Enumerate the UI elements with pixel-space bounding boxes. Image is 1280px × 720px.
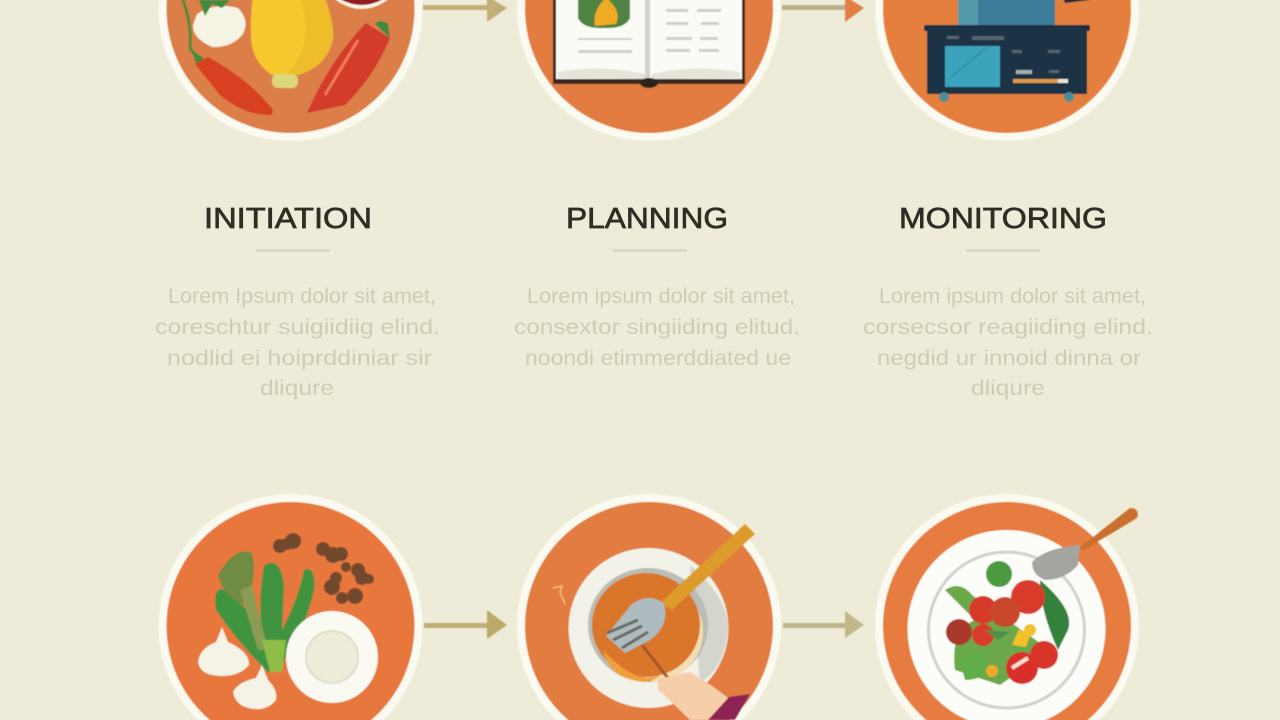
icon: dark handle — [1063, 0, 1092, 3]
heading: initiation: INITIATION — [204, 203, 372, 235]
gauge bar — [1013, 79, 1068, 83]
panel: planning recipe book circle — [517, 0, 781, 141]
icon: knife blade — [642, 645, 668, 678]
arrow: cooking to serving — [783, 611, 864, 638]
panel: ingredients preparation circle — [158, 494, 422, 720]
text block: monitoring body: Lorem ipsum dolor sit amet, — [879, 285, 1146, 308]
text block: planning body: consextor singiiding elitud. — [514, 316, 800, 339]
icon: monitor control box — [924, 25, 1090, 102]
text block: initiation body: coreschtur suigiidiig elind. — [155, 316, 440, 339]
icon: soup bowl — [588, 568, 708, 682]
icon: right red chili — [307, 21, 390, 113]
icon: serving plate — [908, 530, 1106, 720]
panel: initiation ingredients circle — [158, 0, 422, 141]
panel: serving circle — [875, 494, 1139, 720]
text block: initiation body: dliqure — [260, 377, 334, 400]
icon: blue cylinder — [958, 0, 1055, 25]
text block: planning body — [514, 285, 800, 370]
icon: red sauce bowl — [333, 0, 390, 9]
text block: monitoring body: negdid ur innoid dinna or — [877, 347, 1141, 370]
text block: planning body: noondi etimmerddiated ue — [525, 347, 791, 370]
underline: initiation — [256, 249, 330, 252]
heading: planning: PLANNING — [566, 203, 728, 235]
icon: left red chili — [183, 0, 273, 115]
icon: serving spoon — [1032, 508, 1138, 580]
icon: open recipe book — [553, 0, 745, 88]
text block: planning body: Lorem ipsum dolor sit amet, — [527, 285, 795, 308]
arrow: preparation to cooking — [424, 610, 507, 639]
panel: monitoring equipment circle — [875, 0, 1139, 141]
icon: garlic bulb right — [233, 665, 276, 709]
arrow: initiation to planning — [423, 0, 507, 22]
underline: planning — [613, 249, 687, 252]
text block: monitoring body: dliqure — [971, 377, 1045, 400]
icon: sleeve — [708, 694, 750, 720]
icon: salad — [945, 561, 1069, 685]
icon: yellow bell pepper — [251, 0, 333, 88]
text block: monitoring body: corsecsor reagiiding elind. — [863, 316, 1153, 339]
arrow: planning to monitoring — [782, 0, 864, 22]
text block: initiation body: nodlid ei hoiprddiniar sir — [167, 347, 432, 370]
icon: leafy green — [215, 551, 314, 672]
icon: white plate — [568, 548, 728, 708]
icon: white bowl — [286, 611, 378, 703]
icon: wooden handle — [660, 524, 755, 610]
icon: recipe photo — [578, 0, 630, 28]
icon: garlic bulb left — [198, 627, 249, 676]
text block: monitoring body — [863, 285, 1153, 400]
text lines: recipe page — [578, 9, 721, 53]
text block: initiation body: Lorem Ipsum dolor sit amet, — [168, 285, 436, 308]
icon: white onion — [193, 0, 246, 47]
icon: dark spice clusters — [273, 533, 374, 604]
panel: cooking circle — [517, 494, 781, 720]
icon: small garnish — [553, 586, 565, 604]
text block: initiation body — [155, 285, 440, 400]
chart: teal screen — [945, 46, 1000, 87]
icon: hand — [658, 672, 728, 720]
readouts — [947, 36, 1060, 74]
underline: monitoring — [966, 249, 1040, 252]
heading: monitoring: MONITORING — [899, 203, 1107, 235]
icon: fork — [606, 598, 665, 653]
